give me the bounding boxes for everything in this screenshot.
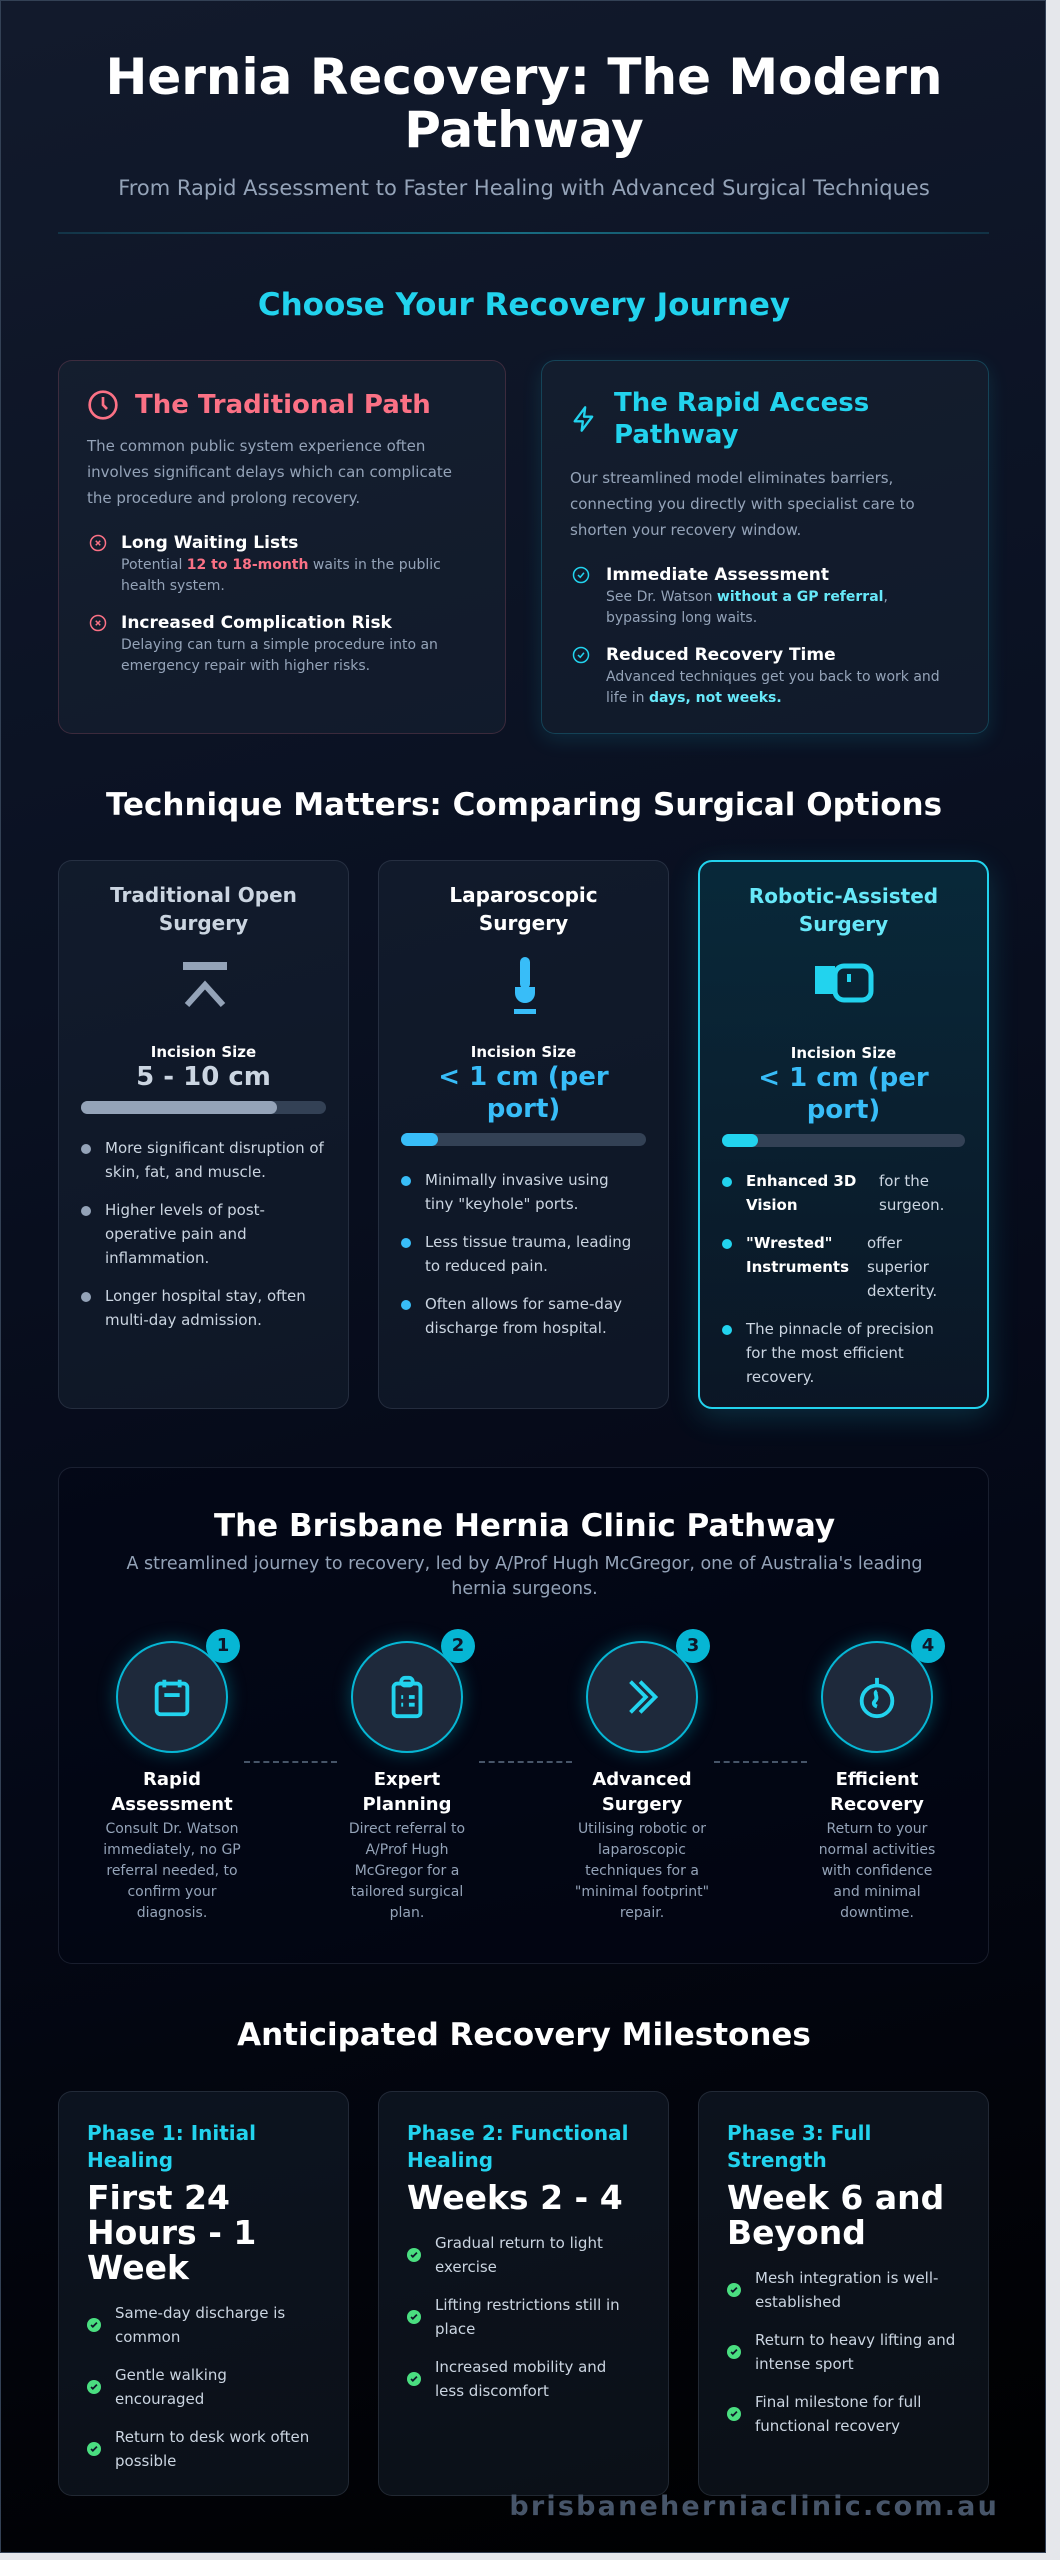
footer: website: brisbaneherniaclinic.com.au [509,2491,999,2522]
step 3: Utilising robotic or laparoscopic techniques for a "minimal footprint" repair. [575,1821,709,1921]
list: phase 3: Return to heavy lifting and intense sport [755,2331,955,2373]
heading: rapid: The Rapid Access [614,388,869,418]
list: phase 3 [727,2269,955,2435]
panel: phase 1: Phase 1: Initial [87,2121,256,2145]
heading: technique: Technique Matters: Comparing Surgical Options [106,787,942,823]
stat: incision robotic [758,1044,929,1125]
list: open [81,1139,324,1329]
icon: clipboard [351,1641,463,1753]
icon: robot [815,964,874,1002]
text: pathway intro: A streamlined journey to recovery, led by A/Prof Hugh McGregor, one of Australia's leading hernia surgeons. [127,1554,922,1599]
list: phase 1: Return to desk work often possible [115,2428,309,2470]
panel: robotic [698,860,989,1409]
title: Pathway [404,101,644,159]
step 4: Recovery [830,1794,924,1815]
icon: chevrons: 3 [687,1635,699,1656]
list: phase 3: Mesh integration is well-established [755,2269,938,2311]
step 4: Efficient [836,1769,918,1790]
title: robotic: Surgery [799,912,888,936]
panel: open surgery [58,860,349,1409]
icon: laparoscope [514,957,536,1014]
panel: phase 3 [698,2091,989,2496]
item: reduced recovery: Advanced techniques get you back to work and life in days, not weeks. [606,669,940,706]
panel: phase 1: First 24 [87,2178,230,2217]
step 2: Expert [374,1769,440,1790]
heading: milestones: Anticipated Recovery Milestones [237,2017,811,2053]
icon: clipboard: 2 [452,1635,464,1656]
icon: recovery: 4 [922,1635,934,1656]
list: phase 2: Lifting restrictions still in place [435,2296,620,2338]
list: robotic: for the [879,1172,929,1190]
list: robotic: surgeon. [879,1196,944,1214]
item: waiting lists [90,533,441,594]
panel: traditional path [58,360,506,734]
list: phase 2: Gradual return to light exercise [435,2234,603,2276]
icon: calendar: 1 [217,1635,229,1656]
panel: phase 2: Healing [407,2148,493,2172]
list: phase 1 [87,2304,309,2470]
list: open: Higher levels of post-operative pain and inflammation. [105,1201,265,1267]
step 1: Consult Dr. Watson immediately, no GP referral needed, to confirm your diagnosis. [103,1821,241,1921]
item: reduced recovery: Reduced Recovery Time [606,645,836,665]
list: robotic: Enhanced 3D [746,1172,856,1190]
step 2 [342,1629,475,1921]
list: phase 1: Same-day discharge is common [115,2304,285,2346]
item: complication risk: Increased Complication Risk [121,613,392,633]
step 4: Return to your normal activities with confidence and minimal downtime. [819,1821,935,1921]
step 1: Rapid [143,1769,201,1790]
panel: phase 1: Week [87,2248,189,2287]
list: phase 2: Increased mobility and less discomfort [435,2358,606,2400]
list: robotic [722,1172,944,1386]
stat: incision lap: Incision Size [471,1043,576,1061]
step 1: Assessment [111,1794,233,1815]
icon: recovery [821,1641,933,1753]
title: Hernia Recovery: The Modern [106,48,942,106]
subtitle: From Rapid Assessment to Faster Healing with Advanced Surgical Techniques [118,176,930,200]
panel: phase 3: Beyond [727,2213,866,2252]
panel: phase 2: Phase 2: Functional [407,2121,628,2145]
item: complication risk: Delaying can turn a simple procedure into an emergency repair with higher risks. [121,637,438,674]
step 2: Planning [362,1794,452,1815]
panel: phase 1: Healing [87,2148,173,2172]
icon: open incision [183,962,227,1007]
step 4 [812,1629,945,1921]
title: lap: Laparoscopic [449,883,598,907]
list: robotic: "Wrested" Instruments [746,1234,849,1276]
stat: incision lap: port) [487,1094,560,1124]
stat: incision lap [438,1043,609,1124]
panel: phase 1 [58,2091,349,2496]
item: waiting lists: Long Waiting Lists [121,533,298,553]
list: phase 1: Gentle walking encouraged [115,2366,227,2408]
panel: phase 3: Phase 3: Full [727,2121,871,2145]
list: robotic: The pinnacle of precision for the most efficient recovery. [746,1320,934,1386]
title: open: Traditional Open [110,883,297,907]
heading: choose journey: Choose Your Recovery Journey [258,287,790,323]
icon: clock [88,390,118,420]
title: lap [449,883,598,935]
title: open: Surgery [159,911,248,935]
step 2: Direct referral to A/Prof Hugh McGregor for a tailored surgical plan. [349,1821,465,1921]
text: rapid intro: Our streamlined model eliminates barriers, connecting you directly with specialist care to shorten your recovery window. [570,469,915,539]
panel: phase 1: Hours - 1 [87,2213,256,2252]
bar: lap [401,1133,646,1146]
panel: phase 2: Weeks 2 - 4 [407,2178,623,2217]
stat: incision open: 5 - 10 cm [136,1062,271,1092]
list: lap: Less tissue trauma, leading to reduced pain. [425,1233,631,1275]
title: lap: Surgery [479,911,568,935]
panel: clinic pathway [58,1467,989,1964]
panel: phase 2 [378,2091,669,2496]
step 1 [103,1629,241,1921]
icon: calendar [116,1641,228,1753]
heading: rapid: Pathway [614,420,739,450]
step 3: Surgery [602,1794,682,1815]
item: immediate assessment [572,565,888,626]
heading: pathway: The Brisbane Hernia Clinic Pathway [214,1508,835,1544]
bar: robotic [722,1134,965,1147]
list: robotic: offer superior dexterity. [867,1234,937,1300]
icon: lightning [574,406,594,432]
list: open: More significant disruption of skin, fat, and muscle. [105,1139,324,1181]
panel: phase 3: Strength [727,2148,827,2172]
item: complication risk [90,613,438,674]
list: phase 2 [407,2234,620,2400]
stat: incision open [136,1043,271,1092]
icon: chevrons [586,1641,698,1753]
stat: incision robotic: port) [807,1095,880,1125]
panel: rapid access [541,360,989,734]
item: immediate assessment: Immediate Assessment [606,565,829,585]
step 3: Advanced [592,1769,692,1790]
item: reduced recovery [572,645,940,706]
title: open [110,883,297,935]
panel: phase 3: Week 6 and [727,2178,944,2217]
title: robotic: Robotic-Assisted [749,884,938,908]
text: traditional intro: The common public system experience often involves significant delays which can complicate the procedure and prolong recovery. [87,437,452,507]
stat: incision robotic: < 1 cm (per [758,1063,929,1093]
list: lap: Often allows for same-day discharge from hospital. [425,1295,622,1337]
bar: open [81,1101,326,1114]
stat: incision lap: < 1 cm (per [438,1062,609,1092]
panel: laparoscopic [378,860,669,1409]
heading: rapid [574,388,869,450]
item: waiting lists: Potential 12 to 18-month waits in the public health system. [121,557,441,594]
heading: traditional: The Traditional Path [135,390,431,420]
step 3 [575,1629,710,1921]
list: open: Longer hospital stay, often multi-day admission. [105,1287,306,1329]
list: robotic: Vision [746,1196,798,1214]
dashed connectors [244,1761,337,1763]
list: lap: Minimally invasive using tiny "keyhole" ports. [425,1171,609,1213]
list: lap [401,1171,631,1337]
title [106,48,942,159]
title: robotic [749,884,938,936]
stat: incision open: Incision Size [151,1043,256,1061]
list: phase 3: Final milestone for full functional recovery [755,2393,921,2435]
stat: incision robotic: Incision Size [791,1044,896,1062]
item: immediate assessment: See Dr. Watson without a GP referral, bypassing long waits. [606,589,888,626]
